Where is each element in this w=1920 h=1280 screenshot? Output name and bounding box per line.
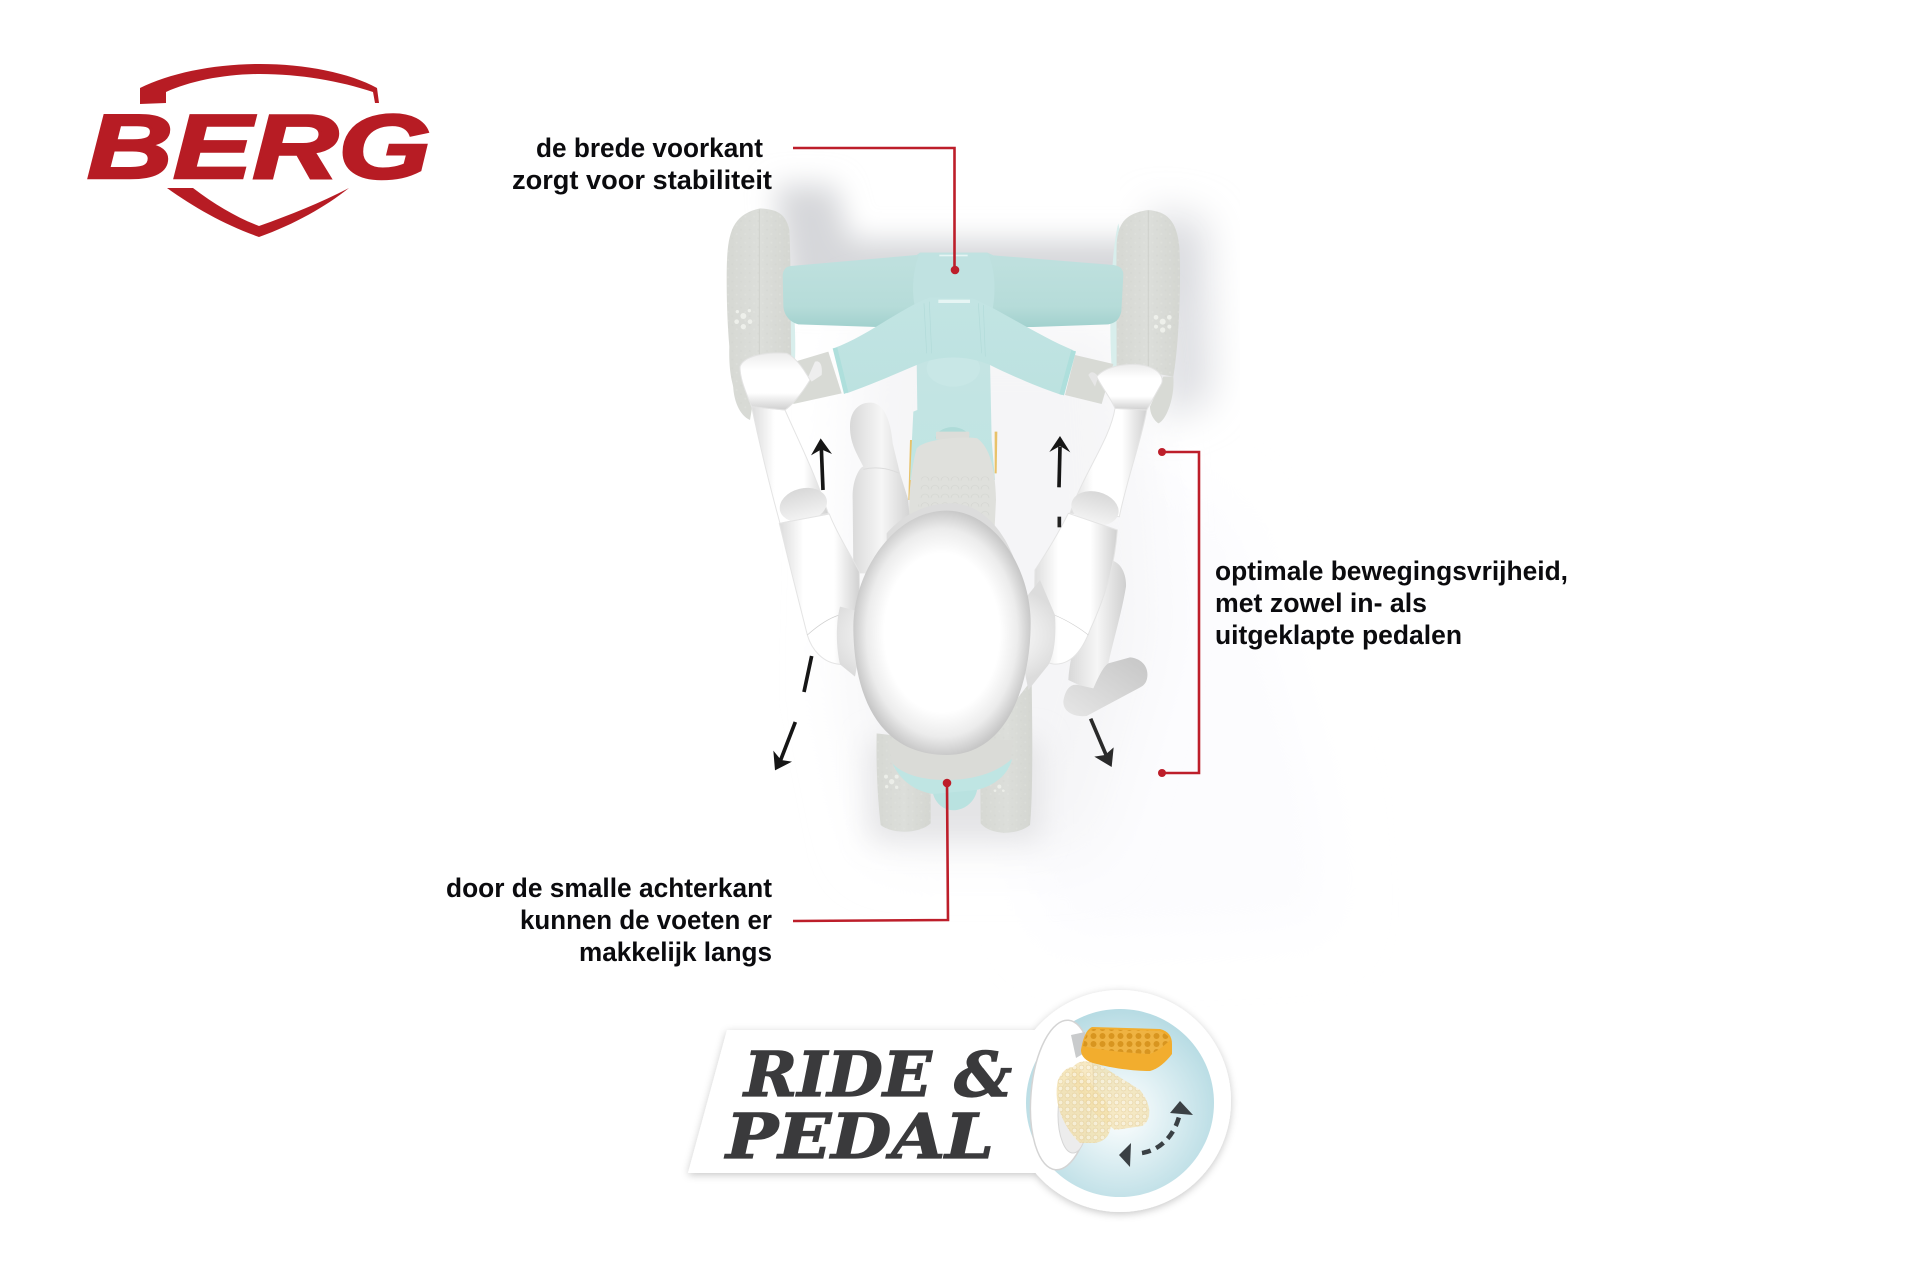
helmet — [853, 503, 1031, 755]
badge blue circle — [1026, 1009, 1214, 1197]
badge title: RIDE & — [742, 1038, 1012, 1111]
label text: de brede voorkant — [536, 133, 763, 163]
connector line — [793, 783, 948, 921]
label text: zorgt voor stabiliteit — [512, 165, 772, 195]
arrows: movement of legs — [773, 436, 1114, 770]
connector line — [793, 148, 954, 270]
label text: optimale bewegingsvrijheid, — [1215, 556, 1568, 586]
label text: makkelijk langs — [579, 937, 772, 967]
logo shield arc — [140, 64, 379, 104]
stem and saddle — [908, 350, 997, 553]
left arm — [740, 353, 828, 523]
right leg and foot — [1063, 560, 1147, 716]
logo shield chevron — [167, 188, 349, 237]
front wheels — [727, 208, 1180, 423]
badge title: PEDAL — [724, 1100, 994, 1173]
callout: brede voorkant — [512, 133, 959, 274]
label text: kunnen de voeten er — [520, 905, 772, 935]
arrow: left foot forward — [811, 438, 832, 490]
arrow: right foot forward — [1049, 436, 1070, 527]
left leg — [850, 403, 913, 573]
upper arms, shoulders — [776, 483, 1122, 690]
rear saddle and mint tail — [888, 740, 1013, 810]
cast shadows — [775, 185, 1330, 940]
right arm — [1070, 364, 1162, 517]
label text: uitgeklapte pedalen — [1215, 620, 1462, 650]
badge: Ride & Pedal — [688, 990, 1231, 1212]
logo wordmark: BERG — [87, 97, 431, 198]
handlebar grips — [793, 352, 1113, 404]
callout: smalle achterkant — [446, 779, 951, 967]
arrow: right foot outward — [1091, 719, 1114, 767]
handlebar — [833, 297, 1076, 395]
callout: bewegingsvrijheid — [1158, 448, 1568, 777]
icon: folded pedals, faded — [1057, 1061, 1149, 1143]
rider: figure seen from above — [740, 353, 1162, 755]
logo: BERG — [87, 64, 431, 237]
badge white shape with shadow — [688, 990, 1231, 1212]
icon: dashed double arrow — [1119, 1101, 1193, 1167]
front body bar — [783, 253, 1123, 327]
label text: door de smalle achterkant — [446, 873, 772, 903]
icon: orange pedal — [1081, 1027, 1172, 1071]
arrow: left foot outward — [773, 656, 812, 770]
icon: wheel hub seen from side — [1025, 1018, 1099, 1172]
bracket — [1162, 452, 1199, 773]
rear wheels — [876, 680, 1032, 833]
bicycle: balance bike — [727, 208, 1180, 833]
label text: met zowel in- als — [1215, 588, 1427, 618]
